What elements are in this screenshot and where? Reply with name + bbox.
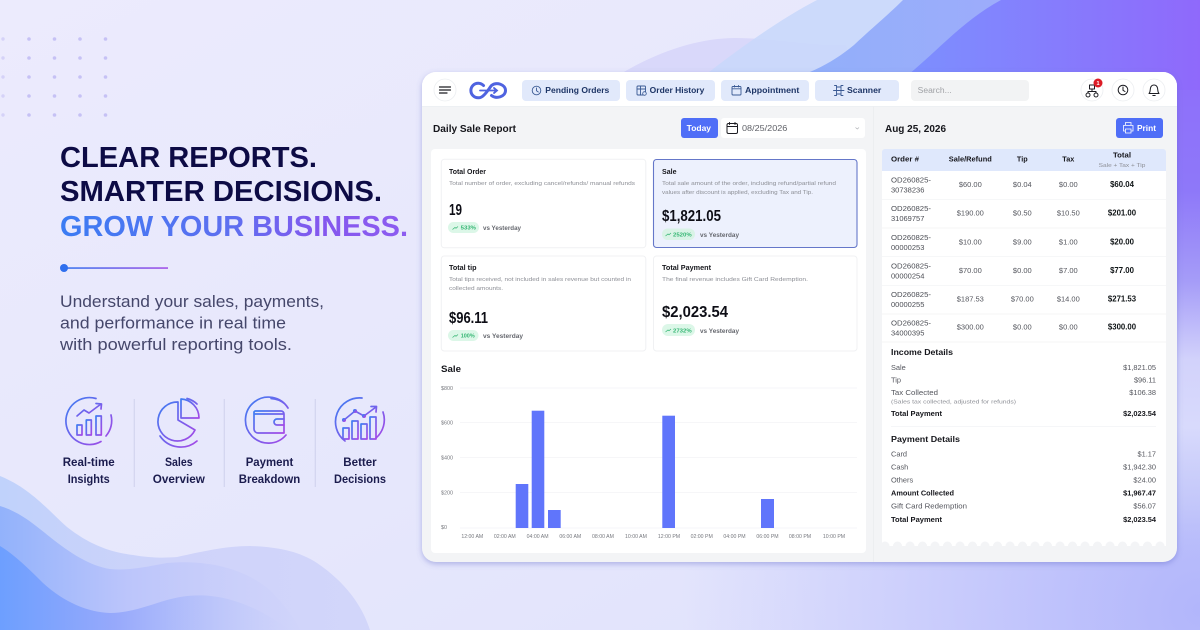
search box	[911, 80, 1029, 101]
bar chart: sale: $0	[441, 525, 447, 531]
payment details: Gift Card Redemption	[891, 502, 967, 510]
title: CLEAR REPORTS.	[60, 142, 317, 174]
print button	[1116, 118, 1163, 138]
nav: pending orders: Pending Orders	[545, 86, 610, 95]
bar chart: sale: 02:00 PM	[691, 534, 713, 540]
bar chart: sale: 10:00 AM	[625, 534, 647, 540]
dot pattern	[1, 37, 107, 117]
orders table: $14.00	[1057, 294, 1080, 304]
card: sale (selected): Total sale amount of the order, including refund/partial refund	[662, 181, 836, 187]
card: total tip	[441, 256, 646, 351]
bar chart: sale: $400	[441, 456, 453, 462]
search box: Search...	[918, 86, 952, 95]
payment details: Card	[891, 450, 907, 458]
icon: bell	[1143, 79, 1165, 101]
income details: Income Details	[891, 347, 953, 357]
card: total tip: 100%	[461, 334, 475, 340]
feature: payment breakdown: Payment	[246, 456, 293, 469]
payment details: $2,023.54	[1123, 515, 1157, 524]
bar chart: sale: 06:00 AM	[559, 534, 581, 540]
nav: appointment	[721, 80, 809, 101]
title	[60, 142, 408, 243]
orders table: 30738236	[891, 186, 924, 194]
card: sale (selected): $1,821.05	[662, 208, 721, 225]
card: sale (selected)	[654, 160, 857, 248]
card: total order: 19	[449, 202, 462, 219]
bar chart: sale: Sale	[441, 364, 461, 374]
orders table: Tax	[1062, 156, 1074, 164]
orders table: OD260825-	[891, 233, 932, 242]
bar chart: sale: $600	[441, 420, 453, 426]
orders table: Order #	[891, 156, 919, 164]
bar chart: sale: 12:00 AM	[461, 534, 483, 540]
payment details: Cash	[891, 462, 908, 472]
feature: better decisions	[334, 398, 386, 486]
icon: organisation with badge: 1	[1096, 81, 1100, 87]
date picker: 08/25/2026	[742, 124, 788, 133]
payment details: $56.07	[1133, 502, 1156, 510]
card: total payment: vs Yesterday	[700, 328, 739, 335]
orders table: $187.53	[957, 294, 984, 304]
orders table: Sale/Refund	[949, 156, 992, 164]
card: total payment: The final revenue includes Gift Card Redemption.	[662, 277, 809, 283]
orders table: Sale + Tax + Tip	[1099, 163, 1145, 169]
card: total tip: $96.11	[449, 310, 488, 327]
orders table: Tip	[1017, 156, 1028, 164]
card: total tip: Total tip	[449, 263, 477, 272]
orders table: 00000253	[891, 243, 924, 252]
intro paragraph: and performance in real time	[60, 314, 286, 332]
feature: sales overview: Sales	[165, 456, 193, 469]
payment details: $24.00	[1133, 476, 1156, 484]
orders table: $0.00	[1059, 180, 1078, 189]
card: total order: vs Yesterday	[483, 225, 521, 232]
card: sale (selected): Sale	[662, 167, 676, 176]
income details: Tip	[891, 376, 901, 384]
feature: sales overview	[153, 398, 206, 486]
today button: Today	[687, 124, 712, 133]
orders table: $201.00	[1108, 208, 1137, 218]
card: total payment: Total Payment	[662, 263, 711, 272]
payment details: Payment Details	[891, 434, 960, 444]
orders table: $70.00	[959, 266, 982, 275]
top navigation bar	[434, 78, 1165, 101]
bar chart: sale: 04:00 AM	[527, 534, 549, 540]
today button	[681, 118, 718, 138]
orders table: 00000254	[891, 272, 924, 280]
receipt panel	[880, 149, 1168, 551]
orders table: $20.00	[1110, 238, 1135, 246]
feature: payment breakdown	[239, 397, 300, 486]
orders table: $60.00	[959, 180, 982, 189]
receipt date: Aug 25, 2026	[885, 124, 946, 135]
orders table: $0.00	[1013, 322, 1032, 332]
feature: sales overview: Overview	[153, 473, 206, 486]
orders table: $60.04	[1110, 180, 1135, 189]
orders table: OD260825-	[891, 290, 932, 299]
bar chart: sale: 06:00 PM	[756, 534, 779, 540]
report panel	[431, 149, 866, 553]
orders table: $300.00	[957, 322, 984, 332]
feature: real-time insights	[63, 398, 115, 486]
logo	[471, 83, 506, 98]
menu button	[434, 79, 456, 101]
orders table: $10.00	[959, 238, 982, 246]
card: sale (selected): vs Yesterday	[700, 232, 739, 239]
nav: scanner	[815, 80, 899, 101]
bar chart: sale: $800	[441, 386, 453, 392]
card: total tip: Total tips received, not included in sales revenue but counted in	[449, 277, 631, 283]
title: SMARTER DECISIONS.	[60, 176, 382, 208]
accent divider	[60, 264, 168, 272]
intro paragraph: Understand your sales, payments,	[60, 293, 324, 311]
income details: $1,821.05	[1123, 363, 1156, 372]
orders table: OD260825-	[891, 204, 932, 213]
income details: $96.11	[1134, 376, 1156, 384]
bar chart: sale: 12:00 PM	[658, 534, 680, 540]
orders table: $9.00	[1013, 238, 1032, 246]
card: total order: 533%	[461, 226, 476, 232]
card: total order: Total Order	[449, 167, 486, 176]
card: total order: Total number of order, excluding cancel/refunds/ manual refunds	[449, 181, 635, 187]
orders table: Total	[1113, 152, 1131, 160]
payment details: Others	[891, 476, 913, 484]
nav: order history	[626, 80, 715, 101]
payment details: $1,967.47	[1123, 488, 1156, 498]
orders table: $0.00	[1013, 266, 1032, 275]
orders table: $0.50	[1013, 208, 1032, 218]
title: GROW YOUR BUSINESS.	[60, 211, 408, 243]
card: sale (selected): 2520%	[673, 232, 692, 238]
card: sale (selected): values after discount is applied, excluding Tax and Tip.	[662, 190, 813, 196]
card: total tip: collected amounts.	[449, 286, 504, 292]
income details: $106.38	[1129, 388, 1156, 397]
orders table: 31069757	[891, 214, 924, 223]
feature: real-time insights: Real-time	[63, 456, 115, 469]
card: total payment	[654, 256, 857, 351]
payment details: Total Payment	[891, 515, 943, 524]
income details: Total Payment	[891, 409, 943, 418]
payment details	[891, 434, 1157, 524]
date picker	[721, 118, 865, 138]
bar chart: sale: 04:00 PM	[723, 534, 746, 540]
bar chart: sale: 02:00 AM	[494, 534, 516, 540]
icon: organisation with badge	[1081, 78, 1103, 101]
payment details: $1,942.30	[1123, 462, 1156, 472]
card: total order	[441, 159, 646, 248]
orders table: $271.53	[1108, 294, 1137, 304]
print button: Print	[1137, 124, 1156, 133]
bar chart: sale: 10:00 PM	[823, 534, 845, 540]
income details: (Sales tax collected, adjusted for refunds)	[891, 400, 1016, 406]
payment details: $1.17	[1138, 450, 1156, 458]
orders table: $0.00	[1059, 322, 1078, 332]
card: total tip: vs Yesterday	[483, 333, 523, 340]
orders table: $7.00	[1059, 266, 1078, 275]
orders table: OD260825-	[891, 318, 932, 328]
nav: order history: Order History	[650, 86, 705, 95]
feature row	[63, 397, 386, 487]
bar chart: sale	[441, 364, 857, 540]
dashboard window	[422, 72, 1177, 562]
intro paragraph	[59, 293, 324, 354]
payment details: Amount Collected	[891, 488, 954, 498]
bar chart: sale: $200	[441, 490, 453, 496]
icon: clock	[1112, 79, 1134, 101]
bar chart: sale: 08:00 AM	[592, 534, 614, 540]
card: total payment: 2732%	[673, 328, 692, 334]
nav: scanner: Scanner	[847, 86, 881, 95]
feature: payment breakdown: Breakdown	[239, 473, 300, 486]
orders table: $300.00	[1108, 322, 1137, 332]
intro paragraph: with powerful reporting tools.	[59, 336, 292, 354]
orders table: OD260825-	[891, 176, 932, 184]
report heading: Daily Sale Report	[433, 124, 517, 135]
orders table: $1.00	[1059, 238, 1078, 246]
orders table: 34000395	[891, 328, 924, 338]
orders table	[882, 149, 1166, 342]
feature: real-time insights: Insights	[68, 473, 110, 486]
feature: better decisions: Better	[343, 456, 377, 469]
income details: $2,023.54	[1123, 409, 1157, 418]
orders table: $190.00	[957, 208, 984, 218]
income details: Sale	[891, 363, 906, 372]
orders table: $10.50	[1057, 208, 1080, 218]
nav: pending orders	[522, 80, 620, 101]
card: total payment: $2,023.54	[662, 304, 728, 321]
orders table: 00000255	[891, 300, 924, 309]
income details: Tax Collected	[891, 388, 938, 397]
feature: better decisions: Decisions	[334, 473, 386, 486]
orders table: $0.04	[1013, 180, 1032, 189]
bar chart: sale: 08:00 PM	[789, 534, 811, 540]
orders table: $70.00	[1011, 294, 1034, 304]
nav: appointment: Appointment	[745, 86, 800, 95]
orders table: OD260825-	[891, 262, 932, 270]
income details	[891, 347, 1157, 427]
orders table: $77.00	[1110, 266, 1135, 275]
